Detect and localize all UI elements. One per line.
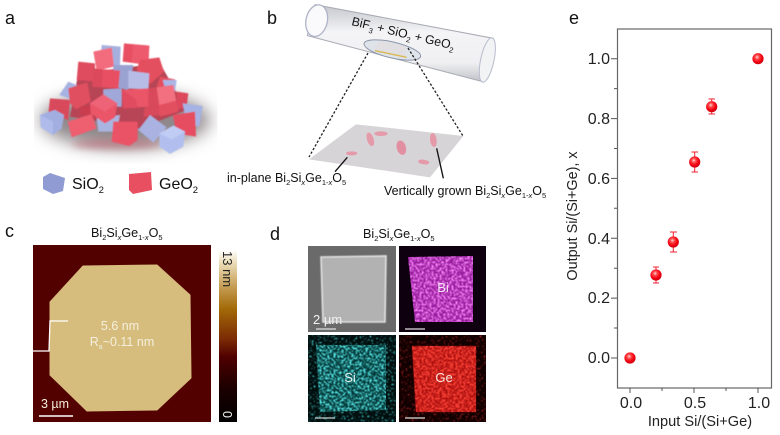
substrate plate with flakes <box>309 124 463 178</box>
illustration: stacked cubes <box>40 43 210 154</box>
label d: d <box>270 224 280 244</box>
label: vertically grown: Vertically grown Bi <box>384 184 486 198</box>
legend: SiO2: 2 <box>99 185 104 196</box>
title c: Bi <box>91 226 102 240</box>
label c: c <box>5 221 14 241</box>
colour scale <box>219 250 237 422</box>
panel e: scatter plot <box>565 8 772 430</box>
Bi map: Bi <box>437 280 449 295</box>
label: in-plane: Ge <box>305 171 322 185</box>
plot frame and ticks <box>611 29 772 393</box>
precursors label on tube: 3 <box>368 26 374 36</box>
y tick labels: 0.8 <box>588 111 610 128</box>
roughness text: a <box>99 344 103 351</box>
zoom dashed lines <box>309 48 463 157</box>
y tick labels: 0.0 <box>588 350 610 367</box>
title d: Si <box>378 227 390 241</box>
y tick labels <box>588 51 610 367</box>
label: vertically grown: Si <box>490 184 501 198</box>
AFM map <box>33 245 211 422</box>
title c: 5 <box>158 233 163 242</box>
label: in-plane: O <box>332 171 342 185</box>
colour scale: 0 <box>220 411 234 418</box>
y tick labels: 0.4 <box>588 231 610 248</box>
title c: 1-x <box>138 233 149 242</box>
panel d: SEM and EDS maps <box>270 224 486 422</box>
Bi map <box>399 246 486 332</box>
title c: Si <box>106 226 118 240</box>
label: in-plane: 2 <box>286 178 290 187</box>
title d: 5 <box>430 234 435 243</box>
legend: GeO2: 2 <box>193 185 198 196</box>
label: vertically grown: x <box>500 191 505 200</box>
scale bar: 3 µm <box>41 397 69 411</box>
Si map: Si <box>344 370 356 385</box>
title d: Ge <box>393 227 410 241</box>
boat with substrate <box>362 36 422 64</box>
panel c: AFM image <box>5 221 237 422</box>
precursors label on tube: 2 <box>448 45 454 55</box>
label: vertically grown: O <box>532 184 542 198</box>
data points <box>624 53 764 364</box>
label: in-plane: x <box>300 178 305 187</box>
label a: a <box>5 8 16 28</box>
title d: x <box>389 234 394 243</box>
legend: GeO2 <box>129 172 198 196</box>
label: vertically grown: 2 <box>486 191 490 200</box>
y tick labels: 0.2 <box>588 290 610 307</box>
legend: SiO2: SiO <box>72 176 99 193</box>
x tick labels <box>620 395 770 412</box>
y tick labels: 0.6 <box>588 171 610 188</box>
label: in-plane: in-plane Bi <box>227 171 286 185</box>
label e: e <box>569 8 579 28</box>
label b: b <box>267 8 277 28</box>
title d: Bi <box>363 227 374 241</box>
Ge map <box>399 335 486 422</box>
label: in-plane: 1-x <box>322 178 332 187</box>
title d: 2 <box>374 234 378 243</box>
label: vertically grown: 1-x <box>522 191 532 200</box>
label: vertically grown: 5 <box>542 191 546 200</box>
x tick labels: 0.5 <box>684 395 706 412</box>
y axis title: Output Si/(Si+Ge), x <box>565 151 581 281</box>
Si map <box>308 335 396 422</box>
x axis title: Input Si/(Si+Ge) <box>648 414 752 430</box>
panel b: CVD tube schematic <box>227 3 546 200</box>
legend: GeO2: GeO <box>159 176 193 193</box>
Ge map: Ge <box>435 370 453 385</box>
title c: 2 <box>102 233 106 242</box>
SEM image <box>308 246 396 332</box>
panel a: oxide cube pile <box>5 8 210 196</box>
precursors label on tube: + SiO <box>372 20 409 41</box>
title c: O <box>149 226 159 240</box>
label: in-plane: Si <box>290 171 301 185</box>
quartz tube <box>303 3 499 84</box>
x tick labels: 0.0 <box>620 395 642 412</box>
height text: 5.6 nm <box>101 319 139 333</box>
error bars <box>653 99 715 283</box>
precursors label on tube: + GeO <box>410 29 452 52</box>
x tick labels: 1.0 <box>748 395 770 412</box>
height profile <box>33 321 68 351</box>
precursors label on tube: BiF <box>350 14 372 32</box>
title d: O <box>421 227 431 241</box>
scale bar <box>39 397 73 416</box>
roughness text: R <box>90 335 99 349</box>
legend: SiO2 <box>43 173 104 196</box>
precursors label on tube: 2 <box>405 35 411 45</box>
label: in-plane: 5 <box>342 178 346 187</box>
colour scale: 13 nm <box>220 251 235 287</box>
SEM image: 2 µm <box>313 312 342 327</box>
title c: x <box>117 233 122 242</box>
label: vertically grown: Ge <box>505 184 522 198</box>
title d: 1-x <box>410 234 421 243</box>
roughness text: ~0.11 nm <box>103 335 154 349</box>
title c: Ge <box>121 226 138 240</box>
y tick labels: 1.0 <box>588 51 610 68</box>
